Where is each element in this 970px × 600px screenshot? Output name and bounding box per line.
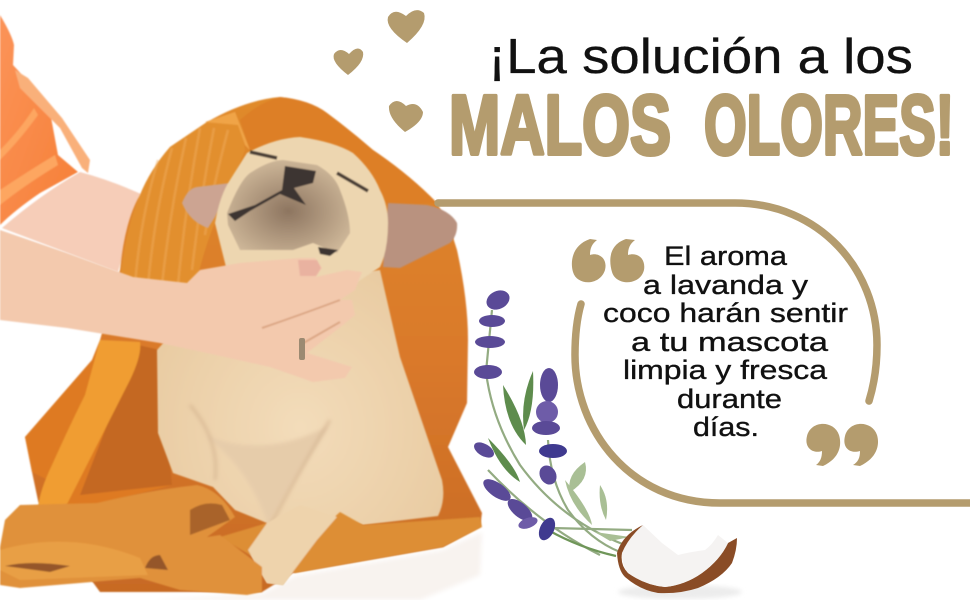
illustration: French bulldog body xyxy=(157,270,443,585)
icon: closing quotation marks xyxy=(806,424,878,466)
illustration: lavender sprigs xyxy=(471,287,632,556)
quote text: durante xyxy=(677,384,782,414)
illustration: bottom towel xyxy=(0,485,482,595)
title highlight xyxy=(449,78,954,172)
icon: heart left xyxy=(334,48,363,75)
icon: opening quotation marks xyxy=(572,239,644,282)
quote text: a lavanda y xyxy=(643,270,809,300)
illustration: coconut shell xyxy=(617,525,742,599)
illustration: upper arm xyxy=(2,172,141,272)
quote text xyxy=(603,241,848,442)
quote text: días. xyxy=(693,412,759,442)
lower left cloth fold xyxy=(25,340,172,512)
illustration: orange sleeve xyxy=(0,15,90,225)
floor shadow xyxy=(150,532,482,600)
quote text: a tu mascota xyxy=(631,327,829,357)
title highlight: MALOS xyxy=(449,78,671,172)
quote text: coco harán sentir xyxy=(603,298,848,328)
quote text: El aroma xyxy=(664,241,788,271)
icon: heart top xyxy=(388,10,425,43)
quote text: limpia y fresca xyxy=(623,355,828,385)
icon: heart bottom xyxy=(389,101,423,132)
icon: wedding ring xyxy=(299,338,305,360)
title line: ¡La solución a los xyxy=(488,30,913,84)
speech frame xyxy=(438,203,970,503)
illustration: forearm and hand xyxy=(0,230,362,382)
illustration: dog head and ears xyxy=(182,137,457,298)
illustration: orange towel behind the dog xyxy=(25,97,482,592)
